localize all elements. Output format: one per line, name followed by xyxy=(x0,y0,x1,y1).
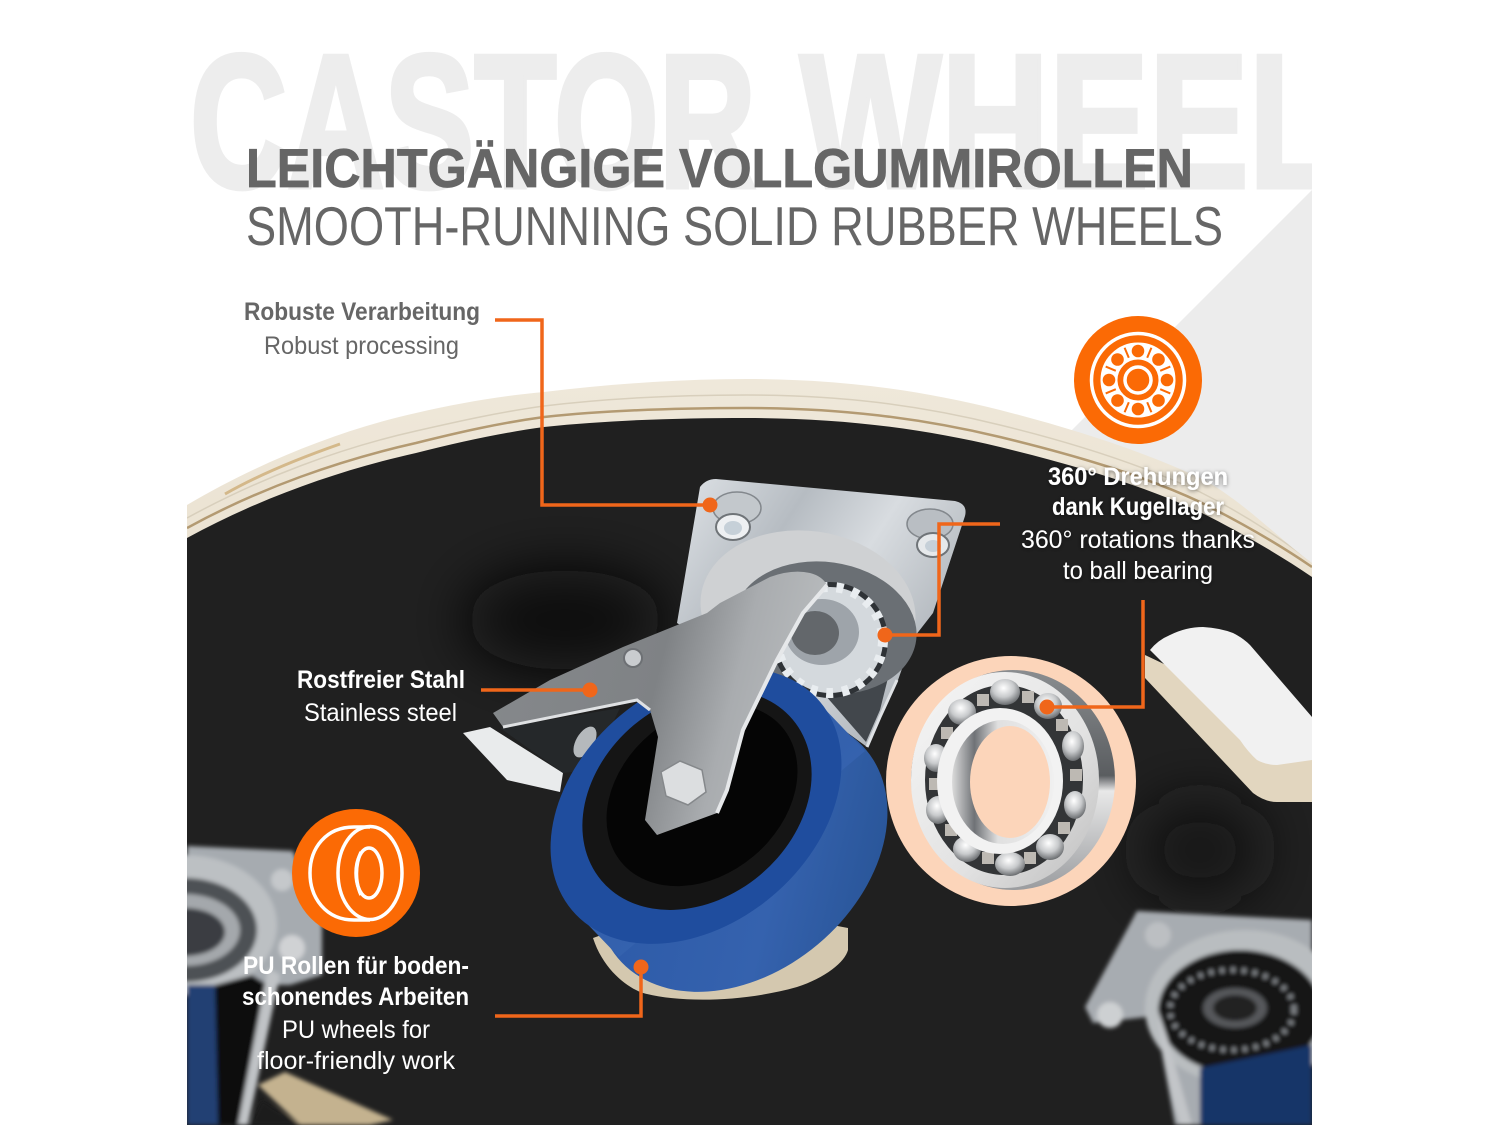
callout: PU wheels xyxy=(242,952,469,1075)
leader line: swivel nut xyxy=(878,524,1000,642)
callout: ball bearing rotations xyxy=(1021,463,1255,585)
blue tyre front face xyxy=(550,672,842,944)
black hub xyxy=(582,697,812,910)
bore xyxy=(970,726,1050,838)
callout: ball bearing rotations: 360° Drehungen xyxy=(1048,463,1228,491)
steel fork and lever xyxy=(493,572,827,835)
toothed lock nut xyxy=(772,582,888,698)
callout: PU wheels: PU Rollen für boden- xyxy=(243,952,469,980)
outer ring face xyxy=(911,672,1099,888)
ball bearing inset xyxy=(886,656,1136,906)
callout: PU wheels: schonendes Arbeiten xyxy=(242,983,469,1011)
handle cut-out xyxy=(1145,627,1312,802)
callout: robust processing: Robuste Verarbeitung xyxy=(244,298,480,326)
heading English: SMOOTH-RUNNING SOLID RUBBER WHEELS xyxy=(246,195,1223,257)
leader line: bearing xyxy=(1040,600,1143,714)
callout: stainless steel xyxy=(297,666,465,727)
leader line: PU wheels xyxy=(495,960,648,1016)
neighbouring castor bottom left xyxy=(187,843,394,1125)
icon: ball bearing xyxy=(1074,316,1202,444)
callout: stainless steel: Rostfreier Stahl xyxy=(297,666,465,694)
fork rivet xyxy=(624,649,642,667)
main swivel castor xyxy=(463,479,966,1049)
plate bolts xyxy=(713,492,953,557)
grey diagonal background shape xyxy=(1050,190,1312,620)
callout: stainless steel: Stainless steel xyxy=(304,699,457,727)
peach circle xyxy=(886,656,1136,906)
mounting plate xyxy=(677,479,966,747)
balls xyxy=(924,679,1086,876)
callout: robust processing xyxy=(244,298,480,360)
callout: ball bearing rotations: 360° rotations thanks xyxy=(1021,526,1255,554)
cage xyxy=(929,691,1082,864)
plywood layers xyxy=(187,395,1312,567)
callout: ball bearing rotations: dank Kugellager xyxy=(1052,493,1224,521)
swivel ring xyxy=(700,530,916,622)
leader line: robust processing xyxy=(495,320,718,512)
ghost title: CASTOR WHEEL: WHEEL xyxy=(800,16,1340,228)
ghost title: CASTOR WHEEL xyxy=(194,52,1312,192)
callout: ball bearing rotations: to ball bearing xyxy=(1063,557,1213,585)
brake pedal xyxy=(463,727,563,792)
soft board shading xyxy=(465,570,1260,900)
photo: wooden board with castors xyxy=(187,379,1312,1125)
hex bolt xyxy=(661,761,706,805)
callout: PU wheels: PU wheels for xyxy=(282,1016,430,1044)
outer ring side band xyxy=(911,670,1115,890)
dark plate underside xyxy=(828,680,888,742)
plywood board edge xyxy=(187,379,1312,577)
infographic canvas xyxy=(187,52,1312,1125)
blue tyre tread xyxy=(588,711,888,992)
wood roller xyxy=(593,926,848,1000)
neighbouring castor bottom right xyxy=(1082,908,1312,1125)
callout: PU wheels: floor-friendly work xyxy=(257,1047,455,1075)
black board surface xyxy=(187,418,1312,1125)
callout: robust processing: Robust processing xyxy=(264,332,459,360)
race cavity xyxy=(925,685,1083,875)
ghost title: CASTOR WHEEL: CASTOR xyxy=(190,16,756,228)
inner ring xyxy=(937,708,1063,854)
heading German: LEICHTGÄNGIGE VOLLGUMMIROLLEN xyxy=(246,137,1193,199)
icon: wheel xyxy=(292,809,420,937)
leader line: stainless steel xyxy=(481,682,598,698)
